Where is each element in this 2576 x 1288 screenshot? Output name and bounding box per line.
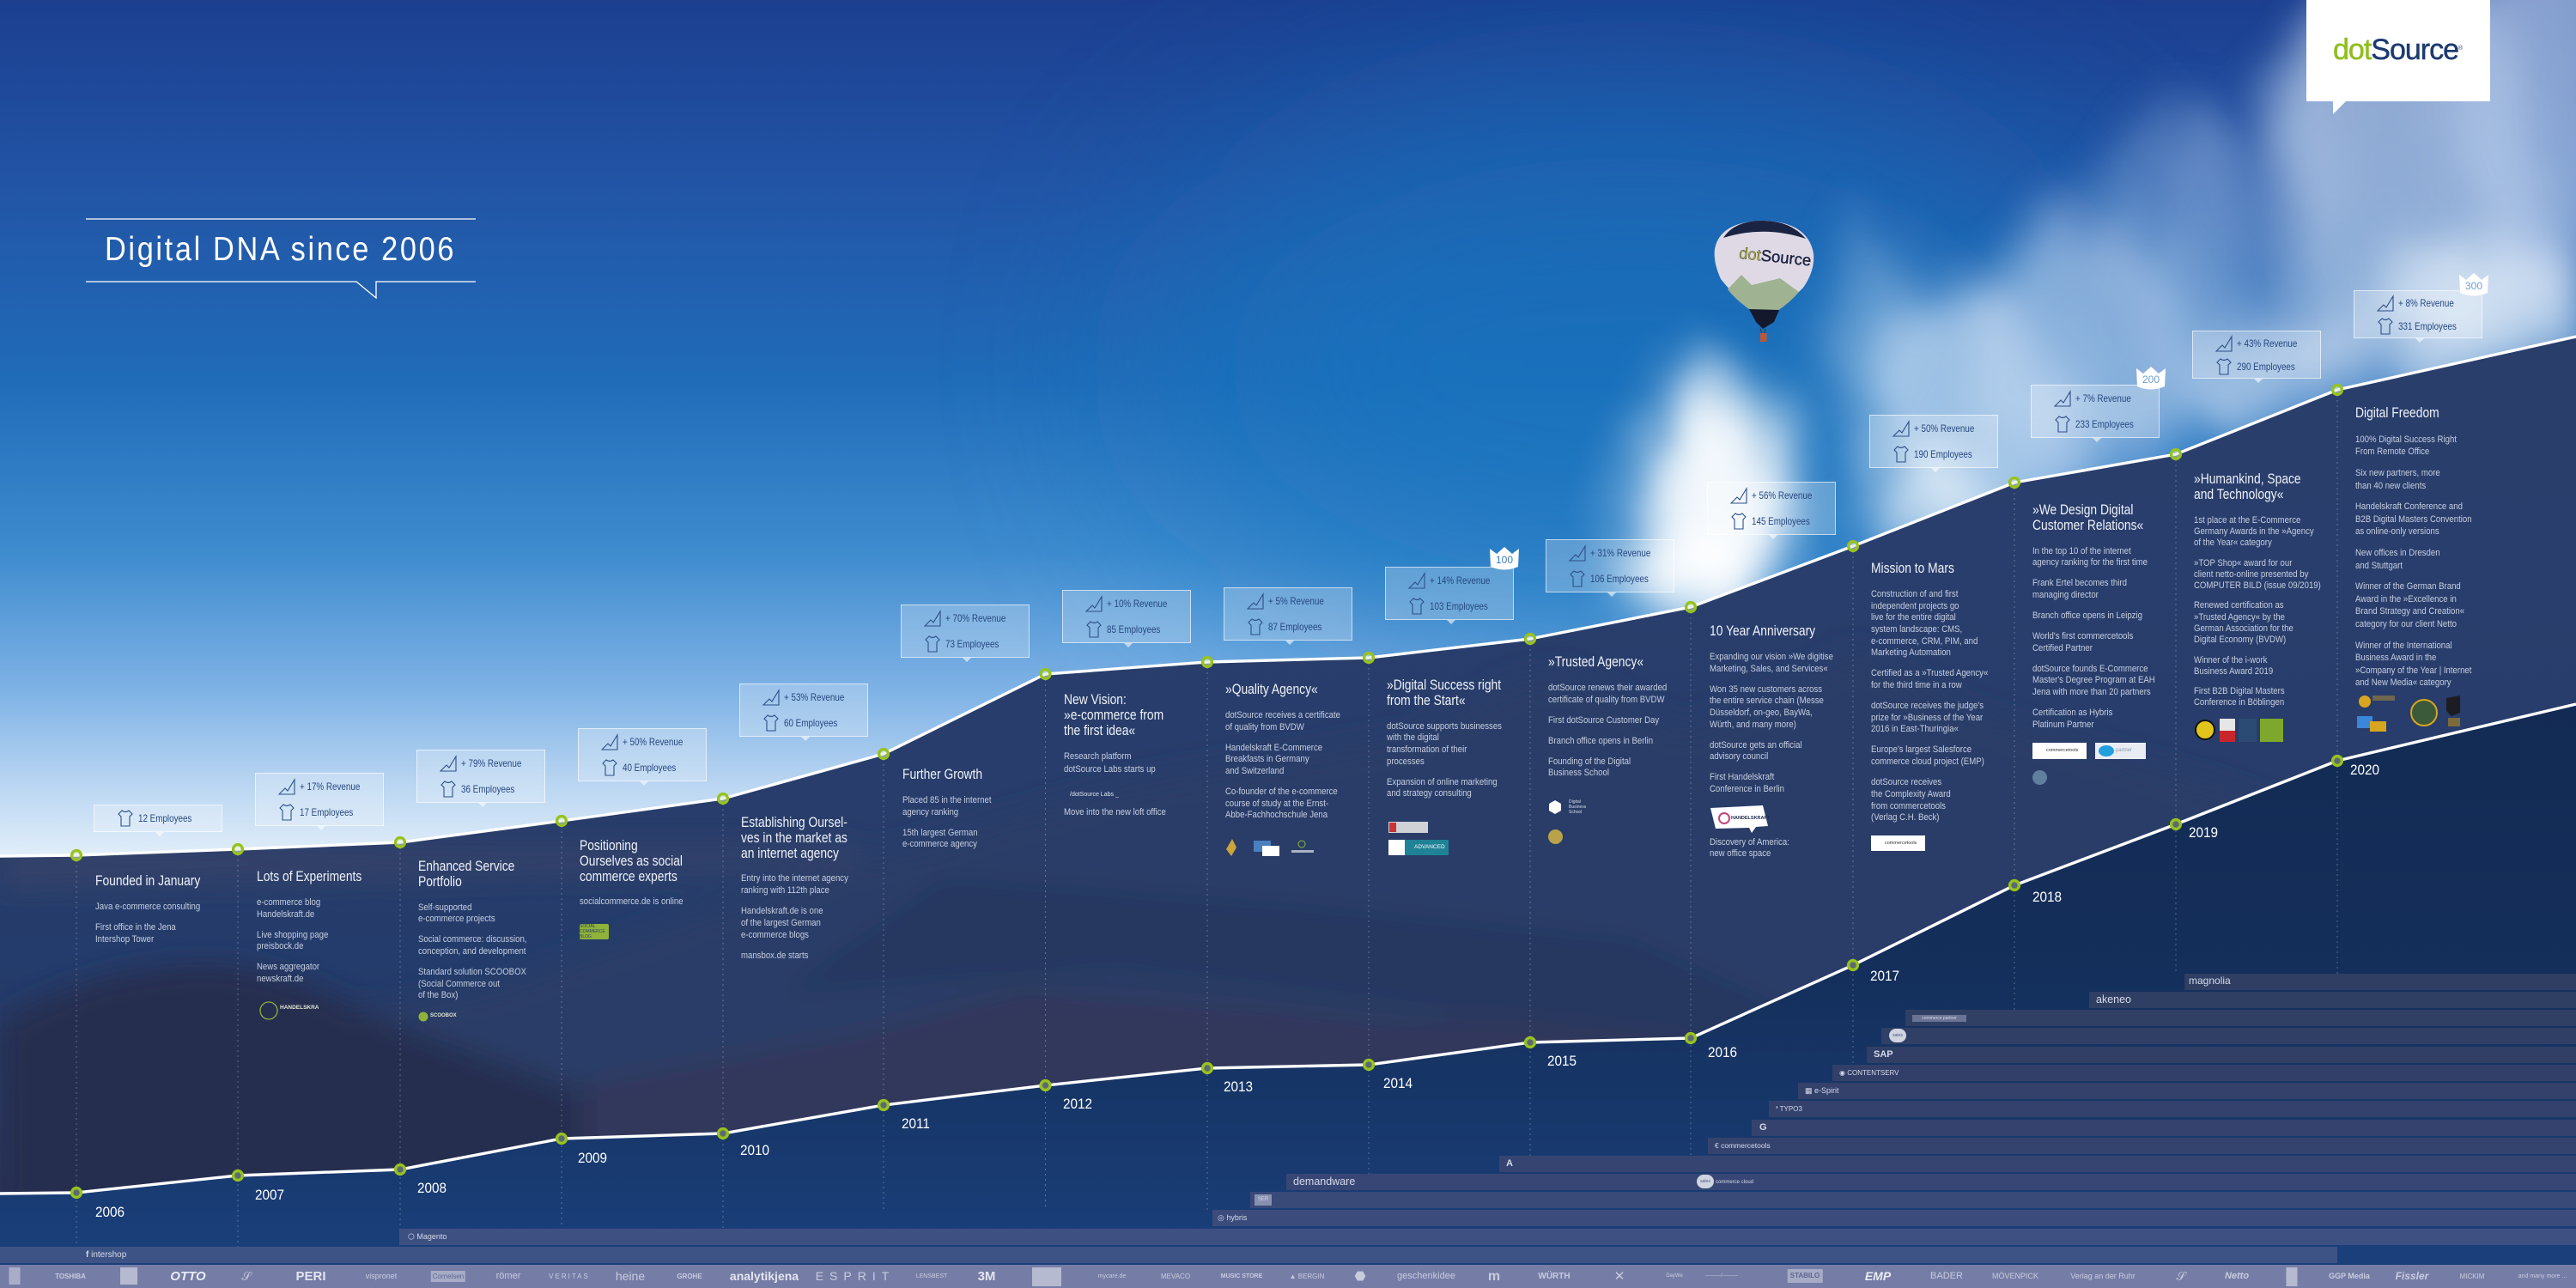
text column 2006 — [95, 873, 201, 945]
text column 2018: Branch office opens in Leipzig — [2032, 611, 2142, 621]
text column 2008: Social commerce: discussion, conception, and development — [418, 934, 526, 957]
logo: dotSource Labs 2012: /dotSource Labs _ — [1070, 792, 1119, 798]
stat card 2008: + 79% Revenue — [461, 757, 521, 769]
stat card 2014: + 14% Revenue — [1430, 574, 1490, 586]
partner bar: Magento — [399, 1228, 2576, 1245]
logo: Handelskraft conference 2016: HANDELSKRAFT — [1731, 816, 1770, 821]
text column 2020: Handelskraft Conference and B2B Digital Masters Convention as online-only versions — [2355, 501, 2472, 537]
text column 2016: Discovery of America: new office space — [1710, 837, 1789, 859]
text column 2011: 15th largest German e-commerce agency — [902, 828, 978, 849]
customer names row: TOSHIBA — [55, 1273, 86, 1280]
stat card 2008: 36 Employees — [461, 783, 514, 795]
partner bar: intershop: f intershop — [86, 1250, 126, 1260]
text column 2009 — [580, 838, 683, 907]
text column 2019: »TOP Shop« award for our client netto-online presented by COMPUTER BILD (issue 09/2019) — [2194, 558, 2321, 591]
customer names row: MEVACO — [1161, 1273, 1190, 1280]
stat card 2007: + 17% Revenue — [300, 781, 360, 793]
partner bar: akeneo — [2089, 992, 2576, 1008]
text column 2010: Handelskraft.de is one of the largest German e-commerce blogs — [741, 906, 823, 939]
stat card 2009: 40 Employees — [623, 762, 676, 774]
stat card 2016 — [1707, 482, 1836, 535]
stat card 2016: 145 Employees — [1752, 515, 1810, 527]
customer names row: OTTO — [170, 1269, 206, 1284]
partner bar: hybris — [1212, 1210, 2576, 1226]
stat card 2018: + 7% Revenue — [2075, 392, 2131, 404]
stat card 2011: + 70% Revenue — [945, 612, 1005, 624]
partner bar: hybris: ◎ hybris — [1218, 1213, 1247, 1222]
text column 2018: World's first commercetools Certified Partner — [2032, 631, 2133, 653]
badges: awards 2020 — [2357, 696, 2464, 732]
text column 2020: Six new partners, more than 40 new clients — [2355, 468, 2440, 491]
text column 2020: New offices in Dresden and Stuttgart — [2355, 548, 2440, 571]
text column 2014: Expansion of online marketing and strategy consulting — [1387, 777, 1498, 799]
stat card 2019: + 43% Revenue — [2237, 337, 2297, 349]
logo: Handelskraft conference 2016 — [1710, 805, 1769, 833]
year labels: 2008 — [417, 1180, 447, 1196]
stat card 2006: 12 Employees — [138, 812, 191, 824]
year labels: 2012 — [1063, 1096, 1092, 1112]
text column 2010: mansbox.de starts — [741, 950, 808, 960]
stat card 2010 — [739, 683, 868, 737]
customer names row: Cornelsen — [433, 1273, 464, 1280]
balloon lettering: dotSource — [1738, 244, 1812, 270]
year labels: 2014 — [1383, 1075, 1413, 1091]
partner bar: magnolia — [2184, 974, 2576, 990]
stat card 2011: 73 Employees — [945, 638, 999, 650]
stat card 2018 — [2031, 385, 2160, 438]
partner bar: salesforce: sales — [1893, 1033, 1903, 1038]
text column 2007 — [257, 869, 361, 984]
lower band below the growth line — [0, 704, 2576, 1288]
text column 2013: dotSource receives a certificate of quality from BVDW — [1225, 710, 1340, 732]
partner bar: SAP — [1867, 1046, 2576, 1063]
title: Digital DNA since 2006: Digital DNA since 2006 — [105, 231, 456, 268]
customer names row: WÜRTH — [1538, 1272, 1571, 1281]
stat card 2019: 290 Employees — [2237, 361, 2295, 373]
stat card 2018: 233 Employees — [2075, 418, 2134, 430]
stat card 2013: 87 Employees — [1268, 621, 1321, 633]
customer names row: geschenkidee — [1397, 1271, 1455, 1281]
text column 2015: Founding of the Digital Business School — [1548, 756, 1631, 778]
text column 2019: First B2B Digital Masters Conference in Böblingen — [2194, 686, 2285, 708]
text column 2008: Standard solution SCOOBOX (Social Commerce out of the Box) — [418, 967, 526, 1000]
text column 2009: socialcommerce.de is online — [580, 896, 683, 907]
customer names row: BADER — [1930, 1271, 1963, 1281]
stat card 2012: 85 Employees — [1107, 623, 1160, 635]
customer names row: MICKIM — [2460, 1273, 2484, 1280]
customer names row: ———/——— — [1705, 1273, 1738, 1279]
logo: Scoobox 2008: SCOOBOX — [430, 1013, 457, 1018]
strip: customer logos — [0, 1265, 2576, 1288]
text column 2015: »Trusted Agency« — [1548, 654, 1643, 670]
text column 2014: dotSource supports businesses with the digital transformation of their processes — [1387, 721, 1502, 767]
logo: Scoobox 2008 — [418, 1011, 457, 1023]
customer names row: GROHE — [677, 1273, 702, 1280]
partner bar: TYPO3: ❛ TYPO3 — [1776, 1105, 1802, 1113]
customer names row: DayWe — [1666, 1273, 1683, 1279]
crown: 100 employees — [1490, 547, 1519, 570]
customer names row: mycare.de — [1098, 1273, 1126, 1279]
customer names row: ✕ — [1614, 1269, 1625, 1284]
stat card 2019 — [2192, 331, 2321, 379]
partner bar: SAP: SAP — [1874, 1049, 1893, 1060]
customer names row: VERITAS — [549, 1273, 590, 1280]
crown: 300 employees: 300 — [2465, 280, 2482, 292]
text column 2019: Renewed certification as »Trusted Agency« by the German Association for the Digital Economy (BVDW) — [2194, 600, 2293, 645]
logo: Handelskraft 2007 — [258, 999, 319, 1022]
partner bar: SER box: SER — [1258, 1197, 1268, 1202]
nodes on bottom line — [72, 756, 2342, 1197]
logo: Digital Business School 2015: Digital Business School — [1569, 799, 1586, 815]
partner bar: SER box — [1250, 1192, 2576, 1208]
customer names row: EMP — [1865, 1269, 1891, 1283]
year labels: 2018 — [2032, 889, 2062, 905]
text column 2013 — [1225, 682, 1340, 820]
text column 2020: Digital Freedom — [2355, 405, 2439, 421]
customer names row: ▲ BERGIN — [1290, 1273, 1324, 1280]
stat card 2011 — [901, 605, 1030, 658]
text column 2020 — [2355, 406, 2472, 698]
partner bar: intershop — [0, 1247, 2337, 1263]
text column 2008 — [418, 859, 526, 1000]
text column 2015: First dotSource Customer Day — [1548, 714, 1659, 725]
text column 2013: Co-founder of the e-commerce course of study at the Ernst- Abbe-Fachhochschule Jena — [1225, 787, 1338, 820]
stat card 2010: + 53% Revenue — [784, 691, 844, 703]
text column 2010 — [741, 815, 848, 960]
stat card 2020 — [2354, 290, 2482, 338]
title: Digital DNA since 2006 — [86, 218, 476, 299]
customer names row: STABILO — [1790, 1272, 1820, 1279]
text column 2014: »Digital Success right from the Start« — [1387, 677, 1501, 708]
logos: partners 2018: partner — [2116, 748, 2132, 753]
logos: partners 2018 — [2032, 743, 2146, 759]
text column 2015: dotSource renews their awarded certificate of quality from BVDW — [1548, 683, 1667, 704]
partner bar: Contentserv — [1832, 1065, 2576, 1081]
logos: partners 2013 — [1226, 839, 1315, 856]
customer names row: 𝒮 — [2177, 1269, 2185, 1283]
balloon — [1714, 221, 1814, 342]
partner bar: G logo — [1752, 1120, 2576, 1135]
stat card 2008 — [416, 750, 545, 803]
text column 2019 — [2194, 472, 2321, 718]
partner bar: salesforce — [1881, 1028, 2576, 1044]
text column 2006: Founded in January — [95, 873, 200, 889]
text column 2018: In the top 10 of the internet agency ranking for the first time — [2032, 546, 2148, 568]
text column 2017: Mission to Mars — [1871, 561, 1954, 576]
text column 2016: First Handelskraft Conference in Berlin — [1710, 772, 1784, 794]
partner bar: Contentserv: ◉ CONTENTSERV — [1839, 1069, 1899, 1077]
logo: commercetools 2017 — [1871, 835, 1925, 851]
year labels: 2013 — [1224, 1078, 1253, 1095]
year labels: 2016 — [1708, 1044, 1737, 1060]
text column 2012 — [1064, 692, 1166, 817]
text column 2006: Java e-commerce consulting — [95, 902, 200, 912]
text column 2017: Europe's largest Salesforce commerce cloud project (EMP) — [1871, 744, 1984, 767]
dotted year guides — [76, 390, 2337, 1247]
stat card 2006 — [94, 805, 222, 832]
text column 2016: 10 Year Anniversary — [1710, 623, 1815, 639]
stat card 2020: 331 Employees — [2398, 320, 2457, 332]
crown: 100 employees: 100 — [1496, 554, 1513, 566]
text column 2008: Enhanced Service Portfolio — [418, 859, 514, 890]
customer names row: heine — [616, 1269, 645, 1283]
text column 2013: Handelskraft E-Commerce Breakfasts in Germany and Switzerland — [1225, 742, 1322, 776]
text column 2016: Expanding our vision »We digitise Marketing, Sales, and Services« — [1710, 652, 1833, 673]
text column 2012: New Vision: »e-commerce from the first idea« — [1064, 692, 1163, 738]
top line: employees and revenue — [0, 337, 2576, 856]
logo: commercetools 2017: commercetools — [1885, 841, 1917, 846]
stat card 2012: + 10% Revenue — [1107, 598, 1167, 610]
logos: partners 2014 — [1388, 822, 1449, 855]
text column 2017 — [1871, 562, 1988, 833]
azure glow behind the balloon — [1151, 86, 2112, 653]
clouds — [1627, 0, 2576, 627]
customer names row: Verlag an der Ruhr — [2070, 1272, 2136, 1280]
year labels: 2010 — [740, 1142, 769, 1158]
customer names row: ⬣ — [1354, 1269, 1366, 1284]
partner bar: commerce partner: commerce partner — [1922, 1016, 1957, 1021]
text column 2016 — [1710, 624, 1833, 869]
stat card 2016: + 56% Revenue — [1752, 489, 1812, 501]
customer names row: PERI — [295, 1269, 326, 1284]
stat card 2009 — [578, 728, 707, 781]
partner bar: e-Spirit: ▦ e-Spirit — [1805, 1086, 1839, 1095]
customer names row: Fissler — [2396, 1270, 2428, 1282]
year labels: 2017 — [1870, 968, 1899, 984]
text column 2016: dotSource gets an official advisory council — [1710, 740, 1802, 762]
stat card 2017 — [1869, 415, 1998, 468]
year labels: 2020 — [2350, 762, 2379, 778]
text column 2020: Winner of the German Brand Award in the »Excellence in Brand Strategy and Creation« category for our client Netto — [2355, 581, 2464, 629]
partner bar: Adobe — [1499, 1156, 2576, 1172]
customer names row: m — [1488, 1269, 1500, 1284]
text column 2008: Self-supported e-commerce projects — [418, 902, 495, 924]
logos: partners 2014: ADVANCED — [1414, 844, 1445, 850]
customer names row: LENSBEST — [916, 1273, 947, 1279]
text column 2007: Live shopping page preisbock.de — [257, 929, 328, 951]
customer names row: and many more ... — [2518, 1273, 2567, 1279]
text column 2019: Winner of the i-work Business Award 2019 — [2194, 655, 2273, 677]
bottom line — [0, 704, 2576, 1194]
stat card 2010: 60 Employees — [784, 717, 837, 729]
stat card 2013: + 5% Revenue — [1268, 595, 1324, 607]
logo: dotSource speech bubble: ® — [2458, 46, 2463, 52]
logos: partners 2018: commercetools — [2046, 748, 2078, 753]
year labels: 2015 — [1547, 1053, 1577, 1069]
partner bar: G logo: G — [1759, 1121, 1767, 1132]
text column 2016: Won 35 new customers across the entire service chain (Messe Düsseldorf, on-geo, BayWa, Würth, and many more) — [1710, 683, 1824, 730]
year labels: 2011 — [902, 1115, 930, 1132]
stat card 2017: 190 Employees — [1914, 448, 1972, 460]
text column 2007: e-commerce blog Handelskraft.de — [257, 897, 320, 919]
badges: awards 2019 — [2195, 719, 2284, 743]
partner bar: e-Spirit — [1798, 1083, 2576, 1099]
text column 2006: First office in the Jena Intershop Tower — [95, 922, 176, 945]
stat card 2015 — [1546, 539, 1674, 592]
logo: dotSource speech bubble: dotSource — [2333, 33, 2458, 66]
customer names row: vispronet — [366, 1272, 397, 1280]
text column 2017: Certified as a »Trusted Agency« for the third time in a row — [1871, 668, 1988, 690]
text column 2014 — [1387, 678, 1502, 809]
text column 2018: Frank Ertel becomes third managing director — [2032, 578, 2127, 600]
partner bar: Magento: ⬡ Magento — [408, 1231, 447, 1240]
text column 2012: Research platform dotSource Labs starts up — [1064, 751, 1156, 775]
customer names row: MUSIC STORE — [1221, 1273, 1262, 1279]
partner bar: demandware and commerce cloud: demandware — [1293, 1176, 1355, 1188]
text column 2013: »Quality Agency« — [1225, 682, 1318, 697]
nodes on top line — [72, 386, 2342, 860]
stat card 2017: + 50% Revenue — [1914, 422, 1974, 434]
text column 2019: »Humankind, Space and Technology« — [2194, 471, 2301, 502]
stat card 2014: 103 Employees — [1430, 600, 1488, 612]
text column 2015: Branch office opens in Berlin — [1548, 735, 1653, 745]
logo: dotSource speech bubble — [2306, 0, 2490, 114]
partner bar: TYPO3 — [1769, 1101, 2576, 1117]
text column 2019: 1st place at the E-Commerce Germany Awards in the »Agency of the Year« category — [2194, 515, 2314, 548]
customer names row: GGP Media — [2329, 1272, 2370, 1280]
partner bar: commercetools — [1708, 1138, 2576, 1154]
partner bar: magnolia: magnolia — [2189, 975, 2231, 987]
text column 2018: dotSource founds E-Commerce Master's Degree Program at EAH Jena with more than 20 partners — [2032, 664, 2155, 697]
stat card 2013 — [1224, 587, 1352, 641]
customer names row: analytikjena — [730, 1269, 799, 1283]
partner bar: demandware and commerce cloud — [1286, 1174, 2576, 1190]
text column 2011 — [902, 767, 992, 849]
text column 2018: Certification as Hybris Platinum Partner — [2032, 708, 2112, 730]
customer names row: Netto — [2225, 1271, 2249, 1281]
partner bar: commerce partner — [1905, 1010, 2576, 1026]
customer names row: ESPRIT — [816, 1269, 895, 1283]
text column 2007: News aggregator newskraft.de — [257, 962, 319, 984]
partner bar: commercetools: € commercetools — [1715, 1141, 1771, 1150]
text column 2020: 100% Digital Success Right From Remote Office — [2355, 434, 2457, 457]
stat card 2015: + 31% Revenue — [1590, 547, 1650, 559]
text column 2012: Move into the new loft office — [1064, 807, 1166, 817]
customer names row: 3M — [978, 1269, 995, 1284]
text column 2017: dotSource receives the Complexity Award from commercetools (Verlag C.H. Beck) — [1871, 777, 1951, 823]
stat card 2014 — [1385, 567, 1514, 620]
text column 2020: Winner of the International Business Award in the »Company of the Year | Internet and New Media« category — [2355, 641, 2471, 688]
stat card 2007 — [255, 773, 384, 826]
crown: 200 employees — [2136, 367, 2166, 390]
stat card 2009: + 50% Revenue — [623, 736, 683, 748]
text column 2007: Lots of Experiments — [257, 869, 361, 884]
customer names row: MÖVENPICK — [1992, 1272, 2038, 1280]
partner bar: demandware and commerce cloud: commerce cloud — [1716, 1180, 1753, 1185]
text column 2011: Further Growth — [902, 767, 982, 782]
text column 2011: Placed 85 in the internet agency ranking — [902, 795, 992, 817]
crown: 300 employees — [2459, 273, 2488, 295]
partner bar: Adobe: A — [1506, 1158, 1513, 1169]
text column 2017: Construction of and first independent projects go live for the entire digital system landscape: CMS, e-commerce, CRM, PIM, and Marketing Automation — [1871, 589, 1978, 658]
text column 2015 — [1548, 655, 1667, 788]
text column 2009: Positioning Ourselves as social commerce experts — [580, 838, 683, 884]
year labels: 2009 — [578, 1150, 607, 1166]
text column 2017: dotSource receives the judge's prize for »Business of the Year 2016 in East-Thuringia« — [1871, 701, 1984, 734]
logo: Social Commerce Blog 2009: SOCIAL COMMERCE BLOG — [580, 924, 605, 939]
year labels: 2007 — [255, 1187, 284, 1203]
crown: 200 employees: 200 — [2142, 374, 2160, 386]
year labels: 2019 — [2189, 824, 2218, 841]
text column 2010: Entry into the internet agency ranking with 112th place — [741, 873, 848, 896]
customer names row: 𝒮 — [242, 1269, 251, 1283]
partner bar: akeneo: akeneo — [2096, 993, 2131, 1005]
partner bar: demandware and commerce cloud: sales — [1700, 1179, 1710, 1184]
text column 2010: Establishing Oursel- ves in the market as an internet agency — [741, 815, 848, 861]
stat card 2015: 106 Employees — [1590, 573, 1649, 585]
stat card 2020: + 8% Revenue — [2398, 297, 2454, 309]
year labels: 2006 — [95, 1204, 125, 1220]
text column 2018: »We Design Digital Customer Relations« — [2032, 502, 2143, 533]
logo: Digital Business School 2015 — [1548, 799, 1591, 815]
stat card 2012 — [1062, 590, 1191, 643]
stat card 2007: 17 Employees — [300, 806, 353, 818]
badge: globe 2018 — [2032, 770, 2047, 785]
sky gradient — [0, 0, 2576, 867]
mountain silhouette between the two lines — [0, 326, 2576, 1219]
customer names row: römer — [496, 1271, 520, 1281]
badge: globe 2015 — [1548, 829, 1563, 844]
text column 2018 — [2032, 503, 2155, 740]
